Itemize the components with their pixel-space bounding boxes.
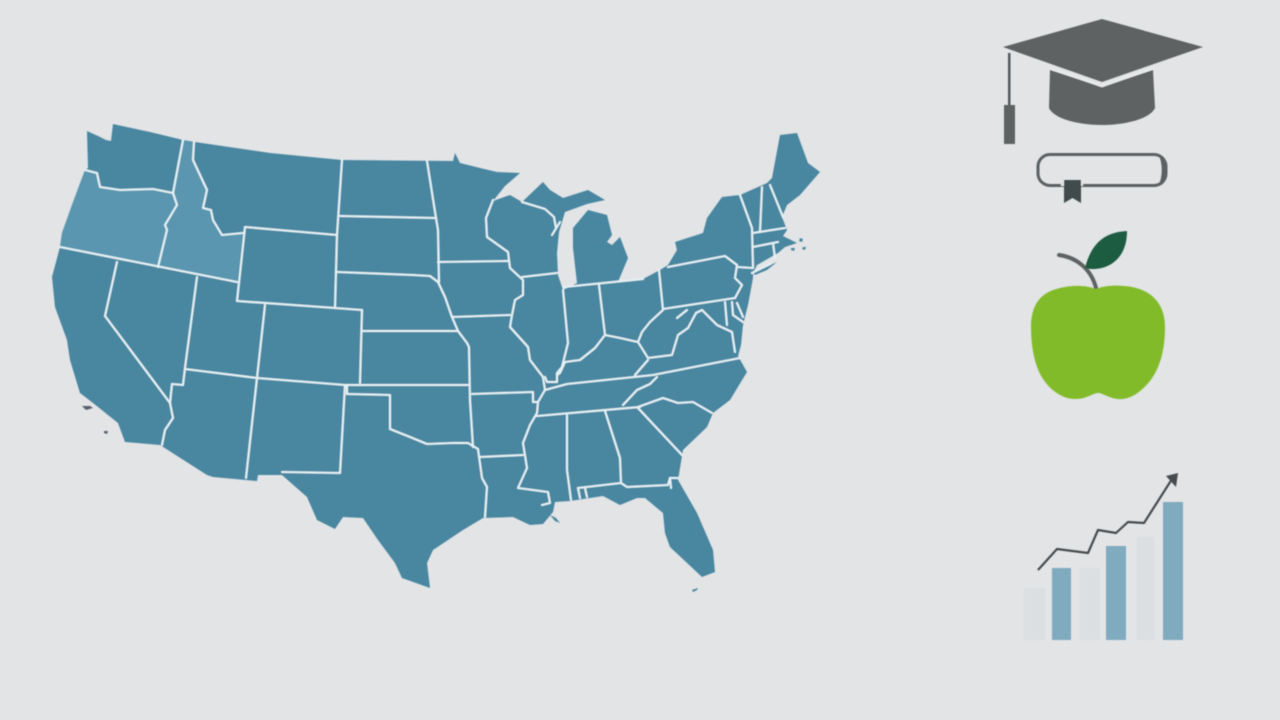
islands: California <box>82 406 108 434</box>
map: United States <box>52 124 820 592</box>
state: Oregon <box>60 170 177 267</box>
state borders <box>60 140 785 517</box>
trend line <box>1038 479 1172 570</box>
icon: green apple <box>1031 231 1165 399</box>
icon: graduation cap <box>1003 19 1203 144</box>
states landmass <box>52 124 820 592</box>
arrow head <box>1166 473 1178 487</box>
state: Idaho <box>158 140 243 282</box>
pale background bars <box>1024 537 1154 640</box>
blue bars <box>1052 502 1183 640</box>
chart: rising bars with trend arrow <box>1024 473 1183 640</box>
icon: book with bookmark <box>1038 154 1167 203</box>
